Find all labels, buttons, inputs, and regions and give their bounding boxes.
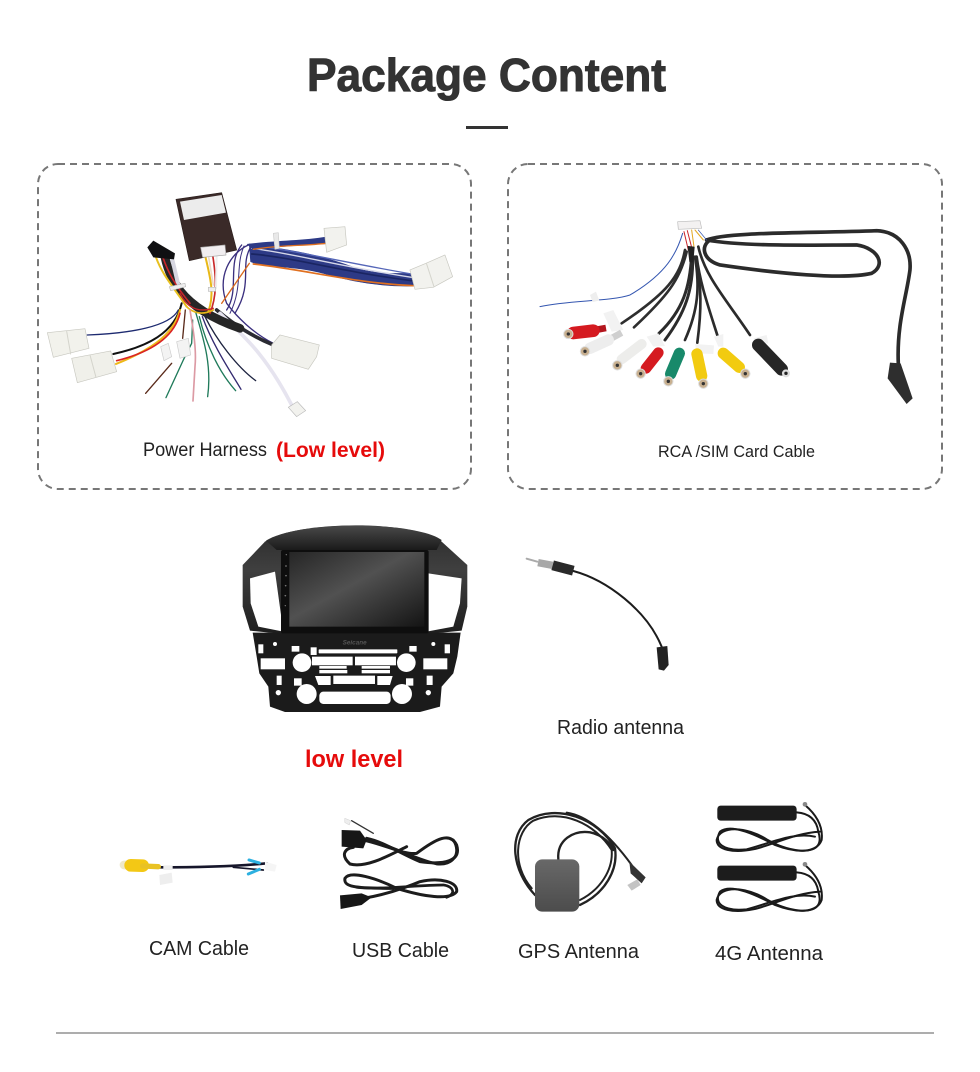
icon: 4g antenna — [717, 802, 822, 911]
icon: cam cable — [124, 860, 277, 885]
panel: power harness — [38, 164, 471, 489]
rca plugs — [593, 328, 606, 330]
label: power harness: Power Harness — [143, 440, 267, 461]
side windows — [250, 572, 283, 632]
icon: radio antenna — [527, 559, 669, 671]
sim connector — [888, 363, 913, 404]
label: usb cable: USB Cable — [352, 940, 449, 962]
seicane brand: Seicane — [343, 640, 367, 647]
icon: gps antenna — [515, 813, 646, 912]
panel: rca and sim cable — [508, 164, 942, 489]
icon: rca sim cable — [540, 221, 913, 404]
label: rca sim cable: RCA /SIM Card Cable — [658, 442, 815, 461]
title underline — [466, 126, 508, 129]
vent and button cutouts — [258, 642, 450, 704]
title: Package Content — [307, 49, 666, 101]
icon: power harness wiring — [47, 193, 453, 417]
label: gps antenna: GPS Antenna — [518, 941, 640, 963]
label: cam cable: CAM Cable — [149, 938, 249, 960]
tags — [590, 292, 599, 302]
panel: 4g antenna — [715, 802, 824, 965]
module box — [176, 193, 237, 261]
icon: usb cable — [340, 818, 457, 909]
label: low level: low level — [305, 746, 403, 773]
panel: radio antenna — [527, 559, 685, 739]
panel: head unit — [243, 525, 467, 773]
label: radio antenna: Radio antenna — [557, 717, 685, 739]
label: low level note: (Low level) — [276, 439, 385, 462]
connector — [678, 221, 702, 229]
icon: head unit — [243, 525, 467, 712]
panel: gps antenna — [515, 813, 646, 963]
panel: cam cable — [124, 860, 277, 960]
screen — [289, 552, 424, 627]
panel: usb cable — [340, 818, 457, 962]
label: 4g antenna: 4G Antenna — [715, 943, 824, 965]
